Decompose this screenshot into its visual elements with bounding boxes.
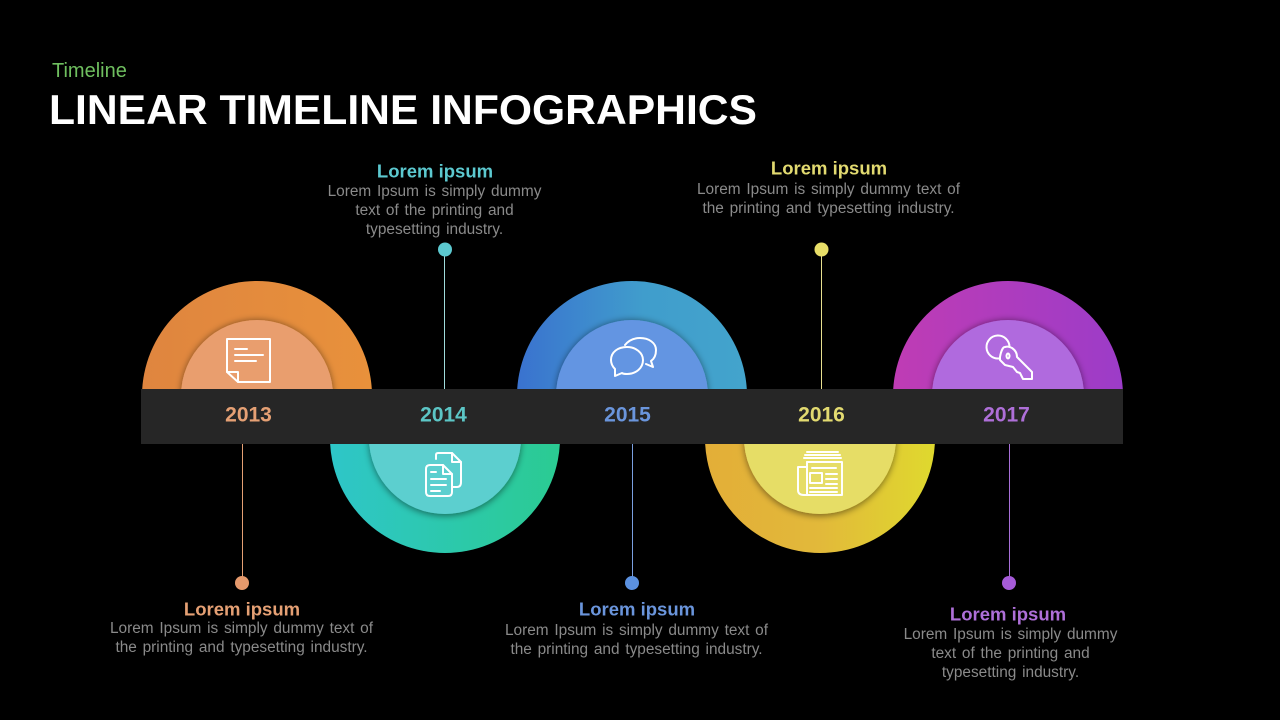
text block 2016: Lorem Ipsum is simply dummy text of (697, 181, 961, 198)
icon: documents (426, 453, 461, 496)
text block 2015 (505, 598, 769, 658)
subtitle: Timeline (52, 60, 127, 82)
connector 2015 (625, 444, 639, 590)
text block 2017: Lorem Ipsum is simply dummy (904, 626, 1118, 643)
connector 2016 (814, 242, 828, 389)
timeline bar (141, 389, 1123, 444)
text block 2016: the printing and typesetting industry. (702, 200, 955, 217)
year 2017: 2017 (983, 404, 1030, 426)
icon: newspaper (798, 452, 842, 495)
semicircle 2014 (330, 444, 560, 553)
text block 2017 (904, 603, 1118, 681)
text block 2013: the printing and typesetting industry. (115, 639, 368, 656)
text block 2013: Lorem Ipsum is simply dummy text of (110, 620, 374, 637)
text block 2014 (328, 160, 542, 238)
text block 2014: text of the printing and (355, 202, 514, 219)
title: LINEAR TIMELINE INFOGRAPHICS (49, 86, 757, 133)
icon: speech bubbles (611, 338, 656, 376)
icon: sticky note (227, 339, 270, 382)
text block 2017: Lorem ipsum (950, 603, 1066, 624)
connector 2017 (1002, 444, 1016, 590)
text block 2015: Lorem ipsum (579, 598, 695, 619)
text block 2016 (697, 157, 961, 217)
text block 2013 (110, 598, 374, 656)
text block 2016: Lorem ipsum (771, 157, 887, 178)
year 2014: 2014 (420, 404, 467, 426)
text block 2015: the printing and typesetting industry. (510, 641, 763, 658)
connector 2013 (235, 444, 249, 590)
semicircle 2013 (142, 281, 372, 389)
text block 2014: Lorem ipsum (377, 160, 493, 181)
connector 2014 (438, 242, 452, 389)
year 2013: 2013 (225, 404, 272, 426)
text block 2017: typesetting industry. (942, 664, 1079, 681)
year 2016: 2016 (798, 404, 845, 426)
text block 2014: typesetting industry. (366, 221, 503, 238)
semicircle 2016 (705, 444, 935, 553)
semicircle 2015 (517, 281, 747, 389)
icon: keys (987, 336, 1032, 379)
year 2015: 2015 (604, 404, 651, 426)
semicircle 2017 (893, 281, 1123, 389)
text block 2014: Lorem Ipsum is simply dummy (328, 183, 542, 200)
text block 2017: text of the printing and (931, 645, 1090, 662)
text block 2015: Lorem Ipsum is simply dummy text of (505, 622, 769, 639)
text block 2013: Lorem ipsum (184, 598, 300, 619)
